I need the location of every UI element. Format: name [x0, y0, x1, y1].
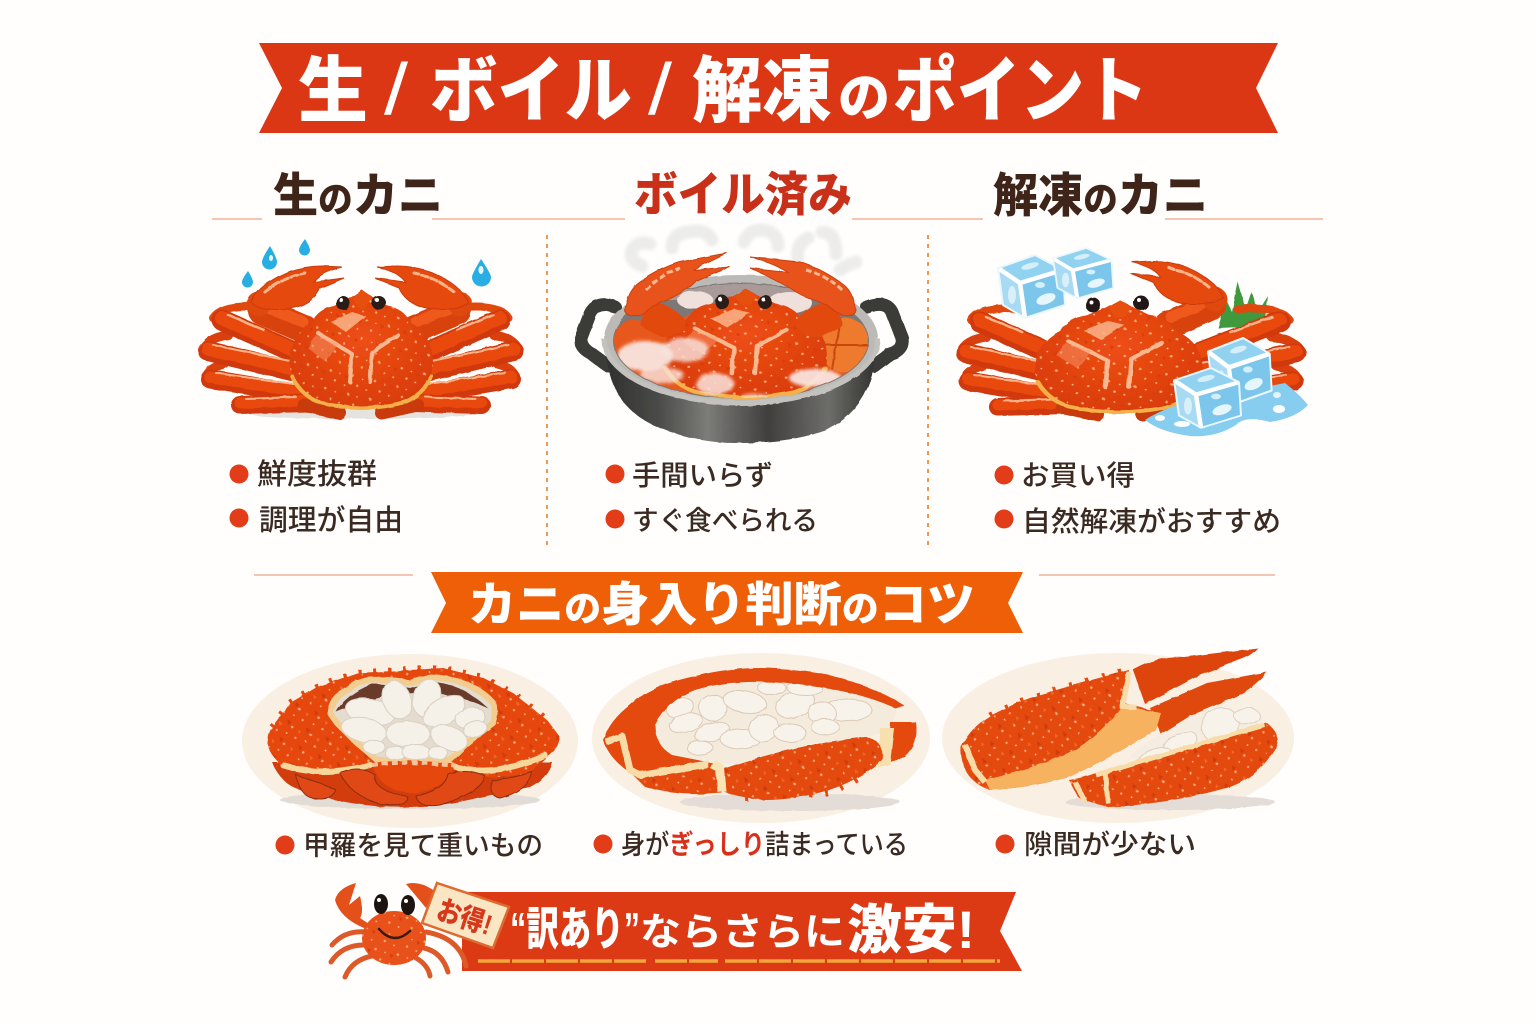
panel: boiled crab: [581, 230, 902, 536]
icon: pot with crab: [581, 253, 902, 443]
icon: ice cubes and puddle: [998, 248, 1308, 436]
tip text: 隙間が少ない: [1024, 830, 1196, 860]
cream plate: [942, 653, 1294, 823]
panel: shell tip: [242, 654, 578, 861]
title banner: [259, 43, 1278, 133]
mascot smile: [379, 929, 410, 938]
panel: meat tip: [592, 653, 930, 860]
heading: boiled: ボイル済み: [634, 168, 852, 221]
mascot eyes: [374, 894, 415, 915]
bottom banner: [462, 892, 1022, 971]
title text: /: [384, 50, 408, 130]
icon: water drops: [242, 239, 491, 288]
title text: ボイル: [430, 52, 632, 132]
title text: [298, 50, 1148, 132]
mascot body: [362, 911, 426, 965]
banner text: 激安!: [847, 901, 975, 960]
icon: crab leg full of meat: [603, 668, 917, 811]
ribbon: [462, 892, 1022, 971]
mascot claw left: [335, 883, 372, 928]
icon: steam: [631, 230, 856, 270]
icon: raw crab illustration: [203, 266, 518, 419]
icon: crab shell with meat: [267, 668, 560, 809]
tip text: 甲羅を見て重いもの: [303, 831, 543, 861]
icon: claw and split leg: [961, 648, 1278, 810]
icon: mascot crab with sign: [331, 883, 509, 977]
heading: raw crab: 生のカニ: [273, 169, 443, 222]
cream plate: [592, 653, 930, 823]
mascot claw right: [406, 883, 436, 908]
title text: /: [648, 50, 672, 130]
list: raw crab points: [230, 458, 403, 537]
banner text: [510, 901, 975, 960]
ribbon: [431, 572, 1023, 633]
decorative dashed line: [478, 959, 1000, 963]
tip text: 身がぎっしり詰まっている: [621, 829, 908, 860]
panel: thawed crab: [961, 248, 1308, 537]
heading: thawed crab: 解凍のカニ: [993, 169, 1208, 222]
banner ribbon: [259, 43, 1278, 133]
panel: raw crab: [203, 239, 518, 537]
list: boiled crab points: すぐ食べられる: [632, 506, 818, 536]
list: raw crab points: 鮮度抜群: [257, 458, 377, 491]
sign board: [422, 883, 509, 948]
list: boiled crab points: [606, 460, 818, 536]
list: boiled crab points: 手間いらず: [632, 460, 773, 491]
banner text: ならさらに: [640, 912, 845, 954]
list: raw crab points: 調理が自由: [259, 504, 403, 537]
cream plate: [242, 654, 578, 828]
title text: の: [838, 70, 890, 128]
title text: 生: [298, 52, 368, 132]
subheading banner: [431, 572, 1023, 633]
subheading text: カニの身入り判断のコツ: [468, 578, 975, 631]
pot claws: [625, 253, 856, 337]
title text: 解凍: [692, 52, 832, 132]
panel: gap tip: [942, 648, 1294, 860]
title text: ポイント: [893, 52, 1148, 132]
icon: thawed crab with ice: [961, 261, 1301, 415]
list: thawed crab points: お買い得: [1021, 460, 1135, 491]
mascot legs: [331, 932, 466, 977]
banner text: “訳あり”: [510, 903, 640, 955]
list: thawed crab points: [994, 460, 1281, 537]
sign text: お得!: [433, 894, 496, 941]
list: thawed crab points: 自然解凍がおすすめ: [1022, 506, 1281, 537]
